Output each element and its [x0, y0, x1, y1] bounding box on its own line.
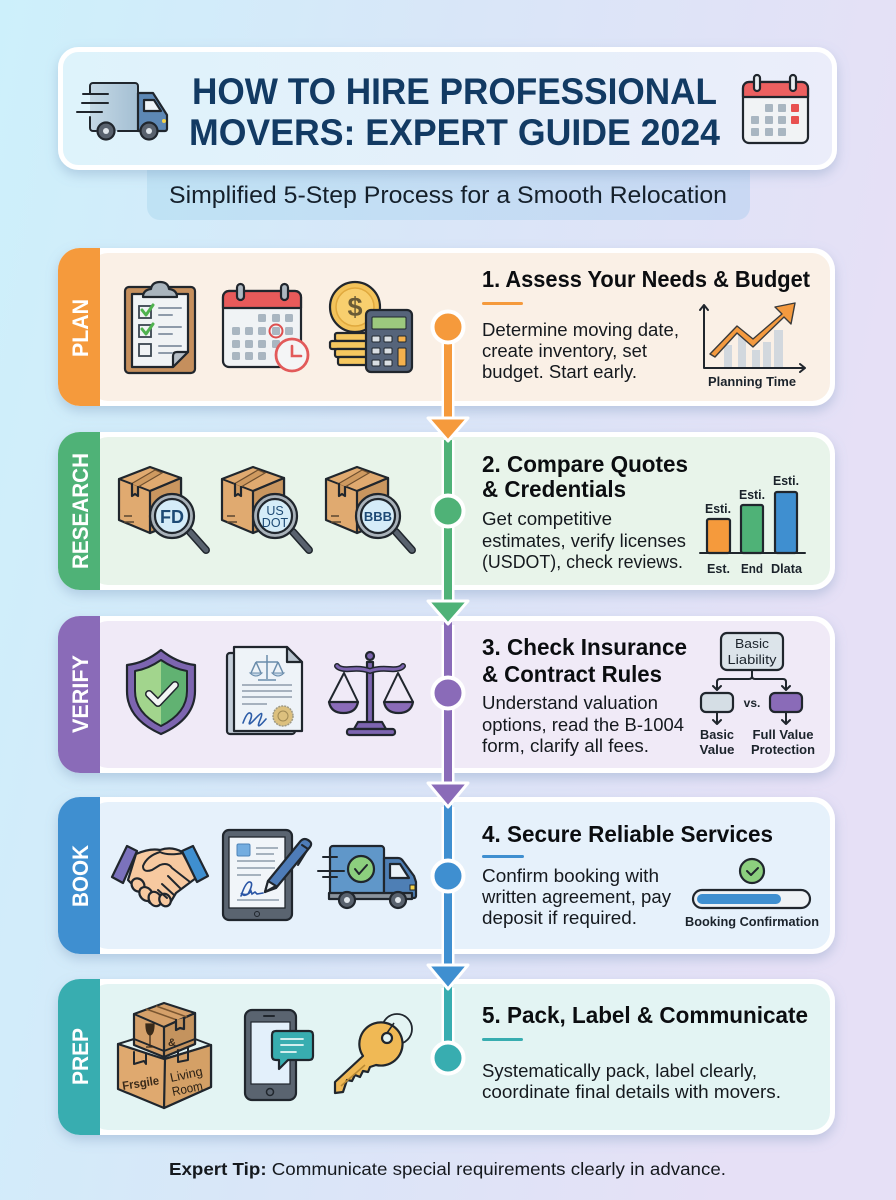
- icon: phone with message: [245, 1010, 313, 1100]
- text: step 3 description: form, clarify all fees.: [482, 736, 649, 756]
- timeline dot: research: [432, 496, 464, 526]
- icon: calendar with clock: [223, 284, 308, 371]
- diagram: liability comparison: [700, 633, 815, 757]
- heading: step 3: 3. Check Insurance: [482, 634, 687, 660]
- icon: tablet with pen: [223, 830, 311, 920]
- icon: box with US DOT magnifier: [222, 467, 309, 550]
- progress bar: booking confirmation: [685, 859, 819, 929]
- icon: coins and calculator: [330, 282, 412, 372]
- timeline dot: verify: [432, 678, 464, 708]
- icon: contract document: [227, 647, 302, 734]
- chart: planning time: [700, 303, 805, 389]
- icon: box with FD magnifier: FD: [160, 507, 184, 527]
- heading: step 3: & Contract Rules: [482, 661, 662, 687]
- text: step 5 description: coordinate final details with movers.: [482, 1082, 781, 1102]
- tab label: VERIFY: [68, 655, 93, 733]
- text: step 3 description: [482, 693, 684, 756]
- heading: step 3: [482, 634, 687, 687]
- icon: stacked labelled boxes: &: [168, 1037, 176, 1049]
- tab label: BOOK: [68, 845, 93, 907]
- text: step 3 description: options, read the B-1004: [482, 715, 684, 735]
- text: step 5 description: Systematically pack, label clearly,: [482, 1061, 757, 1081]
- diagram: liability comparison: Basic: [735, 636, 770, 651]
- text: step 4 description: deposit if required.: [482, 908, 637, 928]
- title: HOW TO HIRE PROFESSIONAL: [192, 71, 717, 112]
- heading: step 1: 1. Assess Your Needs & Budget: [482, 266, 810, 292]
- panel: step 4 book: [58, 797, 835, 954]
- tab label: RESEARCH: [68, 453, 93, 569]
- diagram: liability comparison: Full Value: [752, 728, 814, 742]
- text: step 1 description: create inventory, set: [482, 341, 647, 361]
- icon: calendar: [743, 75, 808, 143]
- subtitle banner: Simplified 5-Step Process for a Smooth Relocation: [169, 182, 727, 209]
- icon: truck with check: [318, 846, 416, 908]
- text: step 5 description: [482, 1061, 781, 1102]
- chart: estimate bars: Esti.: [739, 488, 765, 502]
- icon: stacked labelled boxes: Living: [169, 1064, 204, 1085]
- panel: step 2 research: [58, 432, 835, 590]
- arrow: research to verify: [428, 601, 468, 624]
- panel: step 5 prep: [58, 979, 835, 1135]
- title: [189, 71, 720, 153]
- icon: balance scales: [329, 652, 413, 735]
- tab label: PREP: [68, 1028, 93, 1085]
- icon: box with FD magnifier: [119, 467, 206, 550]
- chart: estimate bars: End: [741, 562, 763, 576]
- heading: step 5: 5. Pack, Label & Communicate: [482, 1002, 808, 1028]
- icon: stacked labelled boxes: [118, 1003, 211, 1108]
- chart: estimate bars: Est.: [707, 562, 730, 576]
- icon: stacked labelled boxes: Room: [171, 1079, 204, 1099]
- panel: step 3 verify: [58, 616, 835, 773]
- heading: step 2: [482, 451, 688, 502]
- timeline dot: plan: [432, 312, 464, 342]
- icon: clipboard checklist: [125, 282, 195, 373]
- icon: box with US DOT magnifier: US: [266, 504, 284, 518]
- heading: step 2: 2. Compare Quotes: [482, 451, 688, 477]
- icon: box with BBB magnifier: BBB: [364, 509, 392, 524]
- icon: stacked labelled boxes: Frsgile: [121, 1073, 160, 1093]
- icon: handshake: [112, 846, 208, 908]
- arrow: verify to book: [428, 783, 468, 807]
- text: step 2 description: [482, 509, 686, 572]
- text: step 2 description: estimates, verify licenses: [482, 531, 686, 551]
- text: step 3 description: Understand valuation: [482, 693, 658, 713]
- icon: shield with check: [127, 650, 195, 734]
- chart: planning time: Planning Time: [708, 375, 796, 389]
- diagram: liability comparison: Basic: [700, 728, 734, 742]
- icon: box with BBB magnifier: [326, 467, 412, 550]
- header panel: [60, 50, 834, 168]
- text: step 1 description: Determine moving date,: [482, 320, 679, 340]
- heading: step 2: & Credentials: [482, 476, 626, 502]
- timeline dot: book: [432, 860, 464, 892]
- icon: key on ring: [335, 1014, 412, 1093]
- heading: step 4: 4. Secure Reliable Services: [482, 821, 773, 847]
- text: step 2 description: (USDOT), check reviews.: [482, 552, 683, 572]
- tab label: PLAN: [68, 299, 93, 357]
- chart: estimate bars: [700, 474, 805, 576]
- chart: estimate bars: Dlata: [771, 562, 803, 576]
- text: step 4 description: Confirm booking with: [482, 866, 659, 886]
- arrow: plan to research: [428, 418, 468, 441]
- icon: moving truck: [77, 83, 167, 140]
- panel: step 1 plan: [58, 248, 835, 406]
- progress bar: booking confirmation: Booking Confirmation: [685, 915, 819, 929]
- icon: coins and calculator: $: [347, 292, 363, 322]
- icon: box with US DOT magnifier: DOT: [262, 516, 289, 530]
- arrow: book to prep: [428, 965, 468, 989]
- subtitle banner: [147, 150, 750, 220]
- diagram: liability comparison: vs.: [744, 696, 760, 710]
- chart: estimate bars: Esti.: [705, 502, 731, 516]
- diagram: liability comparison: Protection: [751, 743, 815, 757]
- timeline dot: prep: [432, 1042, 464, 1074]
- title: MOVERS: EXPERT GUIDE 2024: [189, 112, 720, 153]
- text: step 1 description: [482, 320, 679, 382]
- diagram: liability comparison: Liability: [728, 652, 777, 667]
- chart: estimate bars: Esti.: [773, 474, 799, 488]
- text: step 4 description: written agreement, pay: [481, 887, 671, 907]
- text: step 2 description: Get competitive: [482, 509, 612, 529]
- timeline connector: [428, 312, 468, 1074]
- footer tip: Expert Tip: Communicate special requirements clearly in advance.: [169, 1159, 726, 1179]
- text: step 4 description: [481, 866, 671, 928]
- text: step 1 description: budget. Start early.: [482, 362, 637, 382]
- diagram: liability comparison: Value: [700, 743, 735, 757]
